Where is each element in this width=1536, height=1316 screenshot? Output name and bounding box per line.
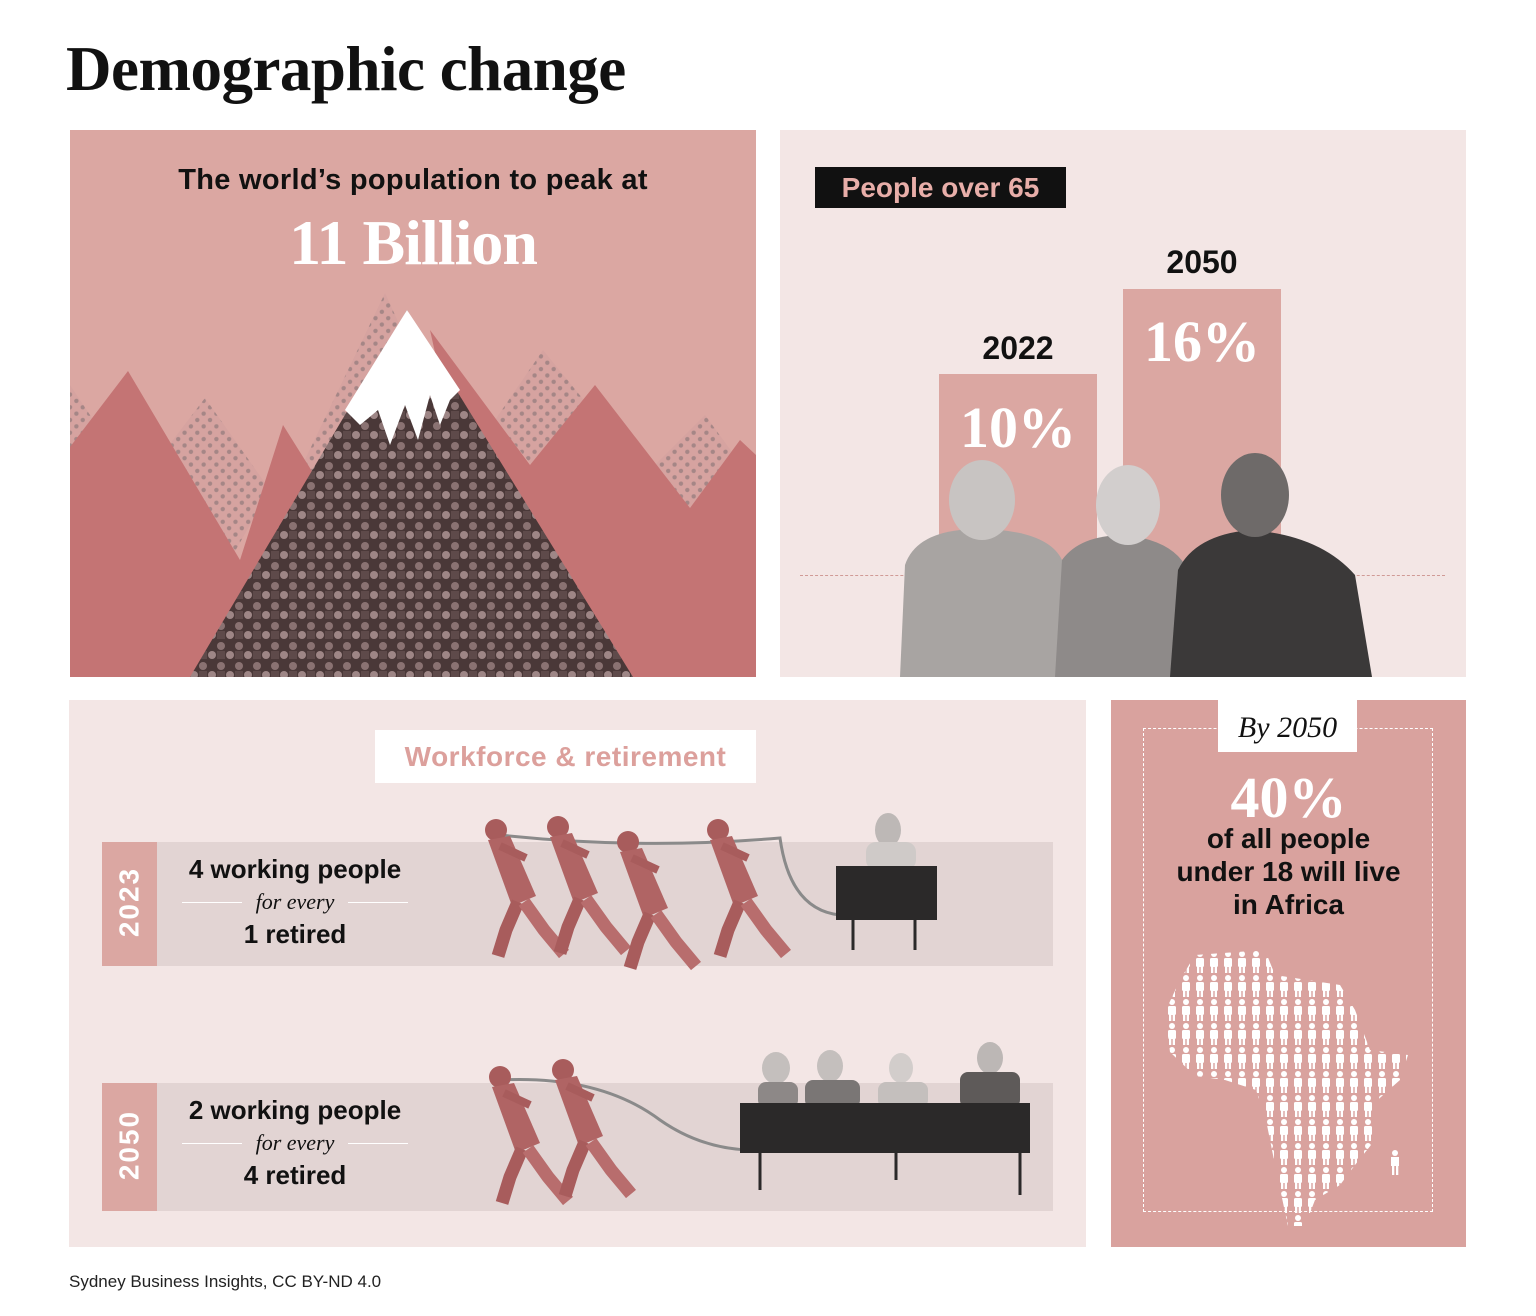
panel: population peak (70, 130, 756, 677)
ratio text 2050: 4 retired (244, 1160, 346, 1190)
illustration: mountains with crowd (70, 297, 756, 677)
label: Workforce & retirement: Workforce & retirement (405, 741, 726, 772)
panel: Africa (1111, 700, 1466, 1247)
label: Workforce & retirement (375, 730, 756, 783)
row: 2023 (102, 842, 1053, 966)
bar: 2022: 2022 (982, 330, 1054, 366)
headline number: 11 Billion: 11 Billion (289, 207, 537, 278)
stat: 40%: 40% (1230, 765, 1346, 830)
ratio text 2023: for every (256, 889, 334, 914)
bar: 2022 (939, 330, 1097, 560)
ratio text 2023 (182, 854, 408, 949)
text: under 18 in Africa: of all people (1207, 823, 1370, 854)
ratio text 2050 (182, 1095, 408, 1190)
label: By 2050: By 2050 (1238, 711, 1337, 744)
year tag 2050 (102, 1083, 157, 1211)
panel: people over 65 (780, 130, 1466, 677)
label: People over 65: People over 65 (842, 172, 1039, 203)
illustration: workers pulling retirees (485, 813, 1030, 1205)
bar: 2050 (1123, 244, 1281, 562)
chain 2023 (500, 835, 840, 915)
ratio text 2023: 4 working people (189, 854, 401, 884)
label: People over 65 (815, 167, 1066, 208)
ratio text 2050: 2 working people (189, 1095, 401, 1125)
map: Africa made of people icons (1168, 951, 1408, 1226)
year tag 2023: 2023 (114, 867, 144, 937)
footer: source: Sydney Business Insights, CC BY-ND 4.0 (69, 1272, 381, 1291)
year tag 2050: 2050 (114, 1110, 144, 1180)
dashed frame (1143, 728, 1433, 1212)
row: 2050 (102, 1083, 1053, 1211)
title: Demographic change (66, 34, 626, 104)
panel: workforce & retirement (69, 700, 1086, 1247)
dashed baseline (800, 575, 1445, 576)
year tag 2023 (102, 842, 157, 966)
text: under 18 in Africa: in Africa (1233, 889, 1344, 920)
retiree on bench 2023 (875, 813, 901, 847)
illustration: elderly people (900, 453, 1372, 677)
label: By 2050 (1218, 700, 1357, 752)
bar: 2050: 16% (1144, 309, 1260, 374)
ratio text 2050: for every (256, 1130, 334, 1155)
retirees on bench 2050 (762, 1052, 790, 1084)
heading: population to peak: The world’s population to peak at (178, 164, 648, 196)
text: under 18 in Africa: under 18 will live (1176, 856, 1401, 887)
bar: 2022: 10% (960, 395, 1076, 460)
ratio text 2023: 1 retired (244, 919, 346, 949)
text: under 18 in Africa (1176, 823, 1401, 920)
bar: 2050: 2050 (1166, 244, 1238, 280)
chain 2050 (500, 1080, 748, 1150)
